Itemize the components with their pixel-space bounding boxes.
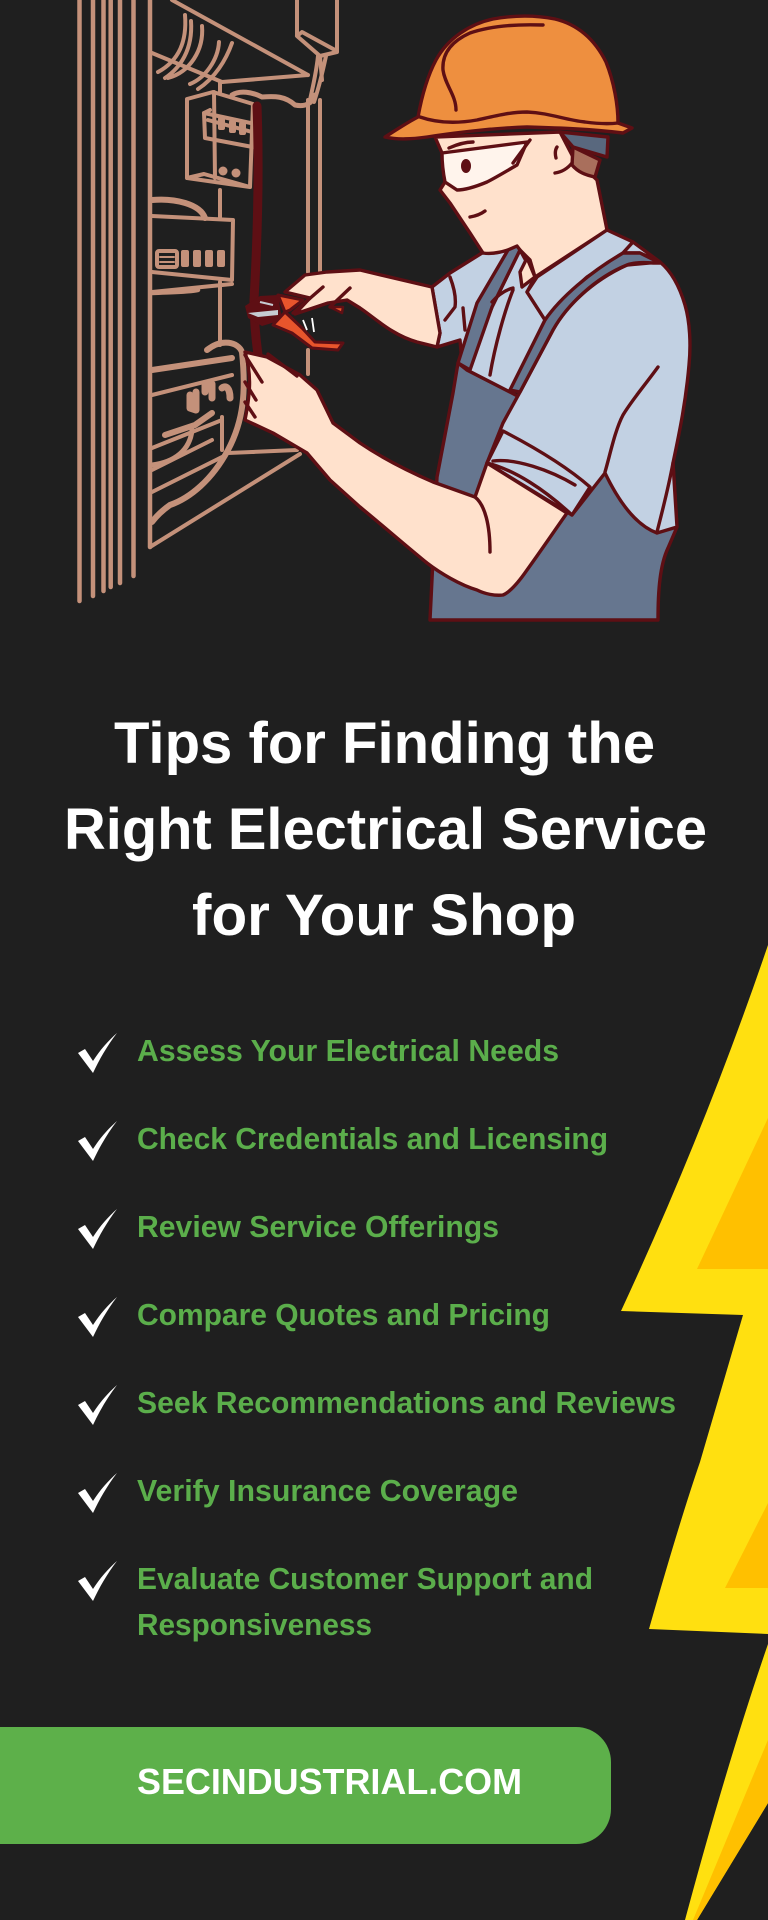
goggle strap and face details (449, 140, 572, 217)
vertical conduit lines (80, 0, 150, 601)
illustration: electrician (245, 16, 690, 620)
item: service offerings: Review Service Offerings (137, 1209, 499, 1244)
sleeve band (487, 431, 590, 515)
bolt shade 2 (725, 1503, 768, 1588)
item: recommendations: Seek Recommendations and Reviews (137, 1385, 676, 1420)
right strap (510, 253, 660, 392)
bolt shade 1 (697, 1118, 768, 1269)
item: insurance: Verify Insurance Coverage (137, 1473, 518, 1508)
checklist (78, 1033, 676, 1642)
illustration: electrical panel (80, 0, 337, 601)
hair band (560, 132, 608, 157)
apron (430, 363, 677, 620)
wire held in hand (254, 106, 258, 355)
website button: SECINDUSTRIAL.COM (137, 1761, 522, 1802)
panel frame (150, 0, 337, 547)
helmet (385, 16, 632, 139)
shirt sleeve left of strap (432, 250, 508, 363)
item: customer support: Evaluate Customer Support and (137, 1561, 593, 1596)
item: customer support (78, 1561, 593, 1642)
item: assess needs: Assess Your Electrical Needs (137, 1033, 559, 1068)
bolt shade 3 (693, 1740, 768, 1920)
title: Right Electrical Service (64, 797, 707, 862)
item: credentials: Check Credentials and Licensing (137, 1121, 608, 1156)
neck and face (435, 132, 607, 277)
breaker box (152, 200, 233, 293)
title: for Your Shop (192, 883, 576, 948)
item: quotes: Compare Quotes and Pricing (137, 1297, 550, 1332)
helmet lines (420, 25, 618, 124)
lightning bolt (621, 945, 768, 1920)
meter box (187, 92, 260, 187)
left strap (458, 246, 520, 370)
neck inner (520, 258, 535, 287)
finger lines (293, 287, 350, 313)
reaching arm with upper hand (285, 270, 440, 347)
arm and sleeve lines (245, 354, 575, 552)
chest creases (425, 277, 673, 532)
collar (527, 230, 633, 320)
shirt chest (467, 250, 545, 392)
eye (461, 159, 471, 173)
shoulder top (623, 242, 660, 262)
wires (158, 15, 326, 106)
hair (572, 147, 600, 177)
pliers (245, 295, 343, 350)
shirt body and sleeve (487, 262, 690, 533)
item: customer support: Responsiveness (137, 1607, 372, 1642)
bolt body (621, 945, 768, 1920)
lower hand and main arm (245, 352, 567, 595)
goggles (442, 142, 527, 190)
lower breaker unit (152, 343, 244, 522)
title (64, 711, 707, 948)
title: Tips for Finding the (114, 711, 655, 776)
website button (0, 1727, 611, 1844)
